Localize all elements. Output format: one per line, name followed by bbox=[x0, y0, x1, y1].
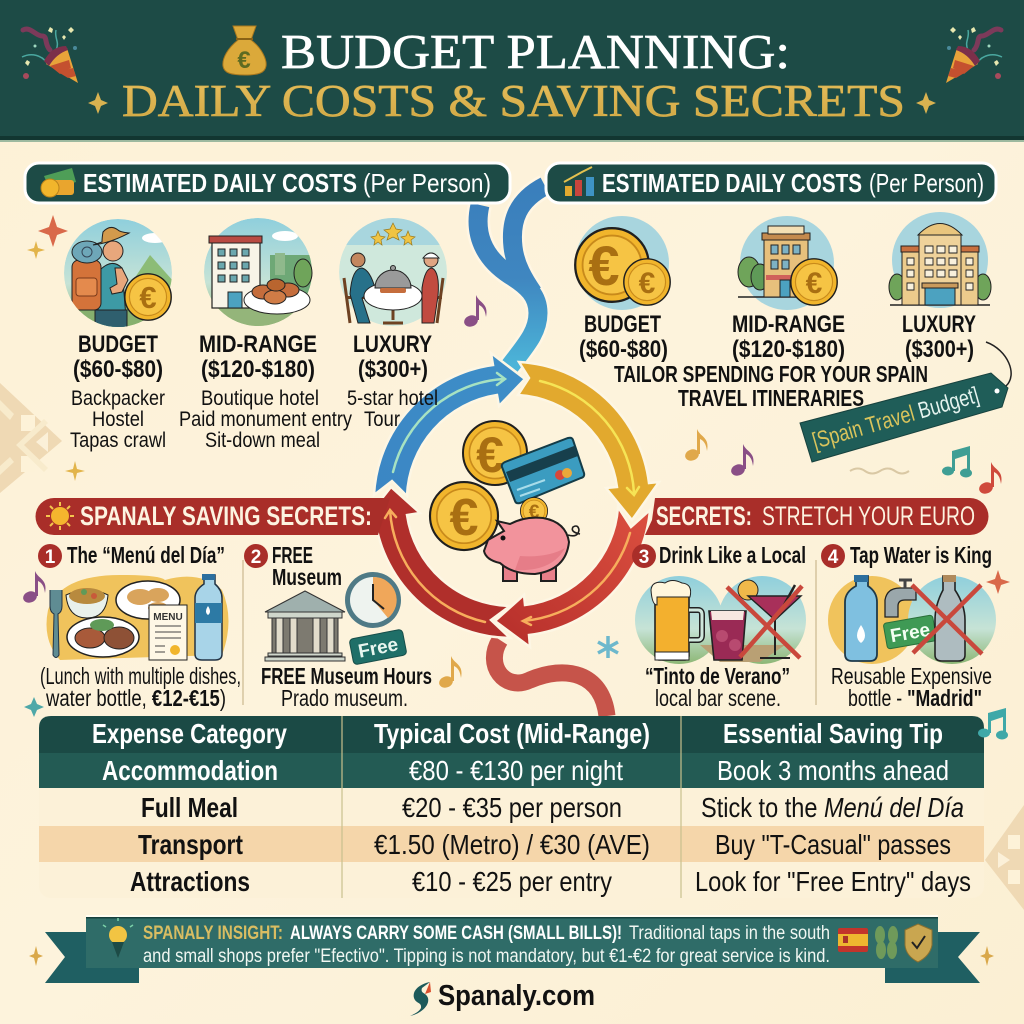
icon: spanish flag bbox=[838, 928, 868, 952]
decorative tile pattern right bbox=[985, 805, 1024, 910]
row: accommodation: Book 3 months ahead bbox=[717, 755, 949, 786]
panel: saving secrets left bbox=[36, 498, 432, 711]
icon: piggy bank with coins and card: € bbox=[476, 427, 504, 483]
tier labels left: Tapas crawl bbox=[70, 429, 166, 452]
heading: spanaly saving secrets: SPANALY SAVING SECRETS: bbox=[80, 501, 372, 531]
tip 3: drink like a local: “Tinto de Verano” bbox=[645, 663, 790, 689]
arrow: orange red bbox=[495, 507, 650, 647]
tip 1: menu del dia bbox=[38, 542, 241, 711]
row: accommodation: €80 - €130 per night bbox=[409, 755, 623, 786]
row: full meal: Full Meal bbox=[141, 792, 238, 823]
icon: backpacker: € bbox=[139, 280, 157, 315]
icon: money bag: € bbox=[237, 47, 251, 74]
icon: drinks bbox=[635, 576, 806, 664]
title line 1: BUDGET PLANNING: bbox=[281, 24, 790, 79]
tier labels right: ($60-$80) bbox=[579, 336, 668, 363]
icon: piggy bank with coins and card: € bbox=[529, 502, 540, 523]
overflow text: luxury descriptions over arrow: Tour bbox=[364, 408, 400, 431]
insight text: SPANALY INSIGHT: bbox=[143, 923, 283, 944]
icon: meal spread bbox=[46, 574, 228, 660]
tip 4: tap water is king bbox=[821, 542, 996, 711]
tier labels right: ($300+) bbox=[905, 336, 974, 363]
tier labels left: ($60-$80) bbox=[73, 356, 163, 383]
tip 2: free museum: Museum bbox=[272, 564, 342, 590]
tier labels right: MID-RANGE bbox=[732, 311, 845, 338]
table header row: Typical Cost (Mid-Range) bbox=[374, 718, 650, 749]
tip 4: tap water is king: 4 bbox=[828, 547, 839, 568]
icon: piggy bank with coins and card bbox=[430, 421, 584, 581]
decorative sparkles and music notes bbox=[22, 215, 1010, 966]
sparkle left of subtitle bbox=[88, 92, 108, 114]
heading: stretch your euro bbox=[645, 498, 988, 535]
table header row bbox=[92, 718, 943, 749]
tip 4: tap water is king: bottle - "Madrid" bbox=[848, 685, 982, 711]
badge: free bbox=[349, 629, 407, 665]
icon: piggy bank with coins and card: € bbox=[450, 489, 478, 547]
icon: euro coins: € bbox=[588, 234, 620, 297]
icon: euro coins: € bbox=[639, 267, 656, 300]
tier labels left: MID-RANGE bbox=[199, 331, 317, 358]
text: tailor spending bbox=[614, 361, 928, 411]
tier labels right bbox=[579, 311, 976, 363]
row: accommodation: Accommodation bbox=[102, 755, 278, 786]
insight text: Traditional taps in the south bbox=[629, 923, 830, 944]
panel: estimated daily costs left bbox=[25, 163, 510, 452]
tier labels left: Boutique hotel bbox=[201, 387, 319, 410]
overflow text: luxury descriptions over arrow bbox=[347, 387, 438, 431]
tip 2: free museum bbox=[244, 542, 432, 711]
heading pill left: ESTIMATED DAILY COSTS bbox=[83, 168, 357, 198]
icon: backpacker bbox=[64, 219, 172, 327]
row: attractions: Attractions bbox=[130, 866, 250, 897]
row: transport bbox=[138, 829, 951, 860]
heading pill right: ESTIMATED DAILY COSTS bbox=[602, 168, 862, 198]
tip 2: free museum: Prado museum. bbox=[281, 685, 408, 711]
table: expense comparison bbox=[39, 716, 984, 898]
tier labels left: Backpacker bbox=[71, 387, 165, 410]
tier labels left: LUXURY bbox=[353, 331, 432, 358]
panel: saving secrets right bbox=[632, 498, 996, 711]
arrow: dark red bbox=[364, 487, 510, 638]
inner highlight lines bbox=[385, 373, 639, 625]
heading: stretch your euro: SECRETS: bbox=[656, 501, 752, 531]
icon: meal spread: MENU bbox=[153, 612, 183, 623]
tier labels left: Paid monument entry bbox=[179, 408, 352, 431]
price tag bbox=[800, 342, 1011, 462]
text: tailor spending: TRAVEL ITINERARIES bbox=[678, 385, 864, 411]
icon: reusable bottle, tap and glass bottle bbox=[828, 575, 996, 664]
tip 3: drink like a local: Drink Like a Local bbox=[659, 542, 806, 568]
icon: mid-range hotel with coin: € bbox=[806, 267, 823, 300]
row: full meal: Stick to the Menú del Día bbox=[701, 792, 964, 823]
icon: shield check bbox=[905, 924, 932, 962]
icon: luxury dining bbox=[339, 218, 447, 326]
icon: mid-range hotel with coin bbox=[738, 216, 837, 310]
icon: boutique hotel with tapas bbox=[204, 218, 312, 326]
icon: museum bbox=[265, 591, 345, 661]
icon: money bag bbox=[223, 26, 266, 75]
tip 2: free museum: 2 bbox=[251, 547, 261, 568]
insight text bbox=[143, 923, 830, 967]
icon: sun bbox=[46, 502, 74, 530]
row: full meal bbox=[141, 792, 964, 823]
logo: spanaly.com bbox=[410, 980, 595, 1016]
tier labels right: BUDGET bbox=[584, 311, 661, 338]
row: attractions: Look for "Free Entry" days bbox=[695, 866, 971, 897]
icon: party popper right bbox=[946, 27, 1002, 83]
icon: euro coins bbox=[575, 216, 670, 310]
tip 2: free museum: FREE bbox=[272, 542, 313, 568]
row: attractions: €10 - €25 per entry bbox=[412, 866, 612, 897]
tier labels left: Hostel bbox=[92, 408, 144, 431]
icon: olive branch bbox=[875, 926, 898, 959]
header band bbox=[0, 0, 1024, 142]
tier labels right: ($120-$180) bbox=[732, 336, 845, 363]
tip 1: menu del dia: water bottle, €12-€15) bbox=[45, 685, 226, 711]
icon: luxury hotel bbox=[889, 212, 991, 308]
row: transport: Transport bbox=[138, 829, 243, 860]
icon: reusable bottle, tap and glass bottle: Free bbox=[889, 620, 932, 647]
icon: light bulb bbox=[103, 918, 133, 958]
icon: party popper left bbox=[22, 27, 78, 83]
tier labels left bbox=[70, 331, 432, 452]
heading pill left: (Per Person) bbox=[363, 168, 491, 198]
row: attractions bbox=[130, 866, 971, 897]
heading pill left bbox=[25, 163, 510, 203]
tip 1: menu del dia: (Lunch with multiple dishes, bbox=[40, 663, 241, 689]
decorative tile pattern left bbox=[0, 383, 62, 493]
tip 3: drink like a local bbox=[632, 542, 806, 711]
icon: clock bbox=[345, 572, 401, 628]
row: full meal: €20 - €35 per person bbox=[402, 792, 622, 823]
tip 2: free museum: FREE Museum Hours bbox=[261, 663, 432, 689]
overflow text: luxury descriptions over arrow: 5-star hotel bbox=[347, 387, 438, 410]
red squiggle connector bbox=[494, 640, 607, 716]
insight text: ALWAYS CARRY SOME CASH (SMALL BILLS)! bbox=[290, 923, 622, 944]
arrow: blue bbox=[374, 353, 525, 496]
tier labels left: BUDGET bbox=[78, 331, 158, 358]
heading pill right: (Per Person) bbox=[869, 168, 984, 198]
price tag: [Spain Travel Budget] bbox=[809, 381, 982, 454]
tier labels left: ($120-$180) bbox=[201, 356, 315, 383]
tip 1: menu del dia: The “Menú del Día” bbox=[67, 542, 225, 568]
title line 2: DAILY COSTS & SAVING SECRETS bbox=[122, 76, 905, 126]
heading pill right bbox=[546, 163, 996, 203]
blue squiggle connector bbox=[478, 186, 545, 366]
tier labels left: ($300+) bbox=[358, 356, 428, 383]
row: transport: Buy "T-Casual" passes bbox=[715, 829, 951, 860]
row: accommodation bbox=[102, 755, 949, 786]
insight text: and small shops prefer "Efectivo". Tipping is not mandatory, but €1-€2 for great service is kind. bbox=[143, 946, 830, 967]
sparkle right of subtitle bbox=[916, 92, 936, 114]
chart: circular money flow arrows bbox=[364, 353, 659, 647]
insight banner bbox=[45, 915, 980, 983]
heading: spanaly saving secrets bbox=[36, 498, 390, 535]
tip 3: drink like a local: 3 bbox=[639, 547, 649, 568]
logo: spanaly.com: Spanaly.com bbox=[438, 980, 595, 1012]
tip 3: drink like a local: local bar scene. bbox=[655, 685, 781, 711]
row: transport: €1.50 (Metro) / €30 (AVE) bbox=[374, 829, 650, 860]
arrow: yellow bbox=[518, 362, 659, 520]
icon: cash and coins bbox=[41, 168, 76, 197]
tier labels right: LUXURY bbox=[902, 311, 976, 338]
table header row: Essential Saving Tip bbox=[723, 718, 943, 749]
panel: estimated daily costs right bbox=[546, 163, 1011, 462]
badge: free: Free bbox=[357, 634, 400, 663]
text: tailor spending: TAILOR SPENDING FOR YOUR SPAIN bbox=[614, 361, 928, 387]
tier labels left: Sit-down meal bbox=[205, 429, 320, 452]
icon: rising bar chart bbox=[564, 167, 594, 196]
tip 1: menu del dia: 1 bbox=[45, 547, 56, 568]
table header row: Expense Category bbox=[92, 718, 287, 749]
